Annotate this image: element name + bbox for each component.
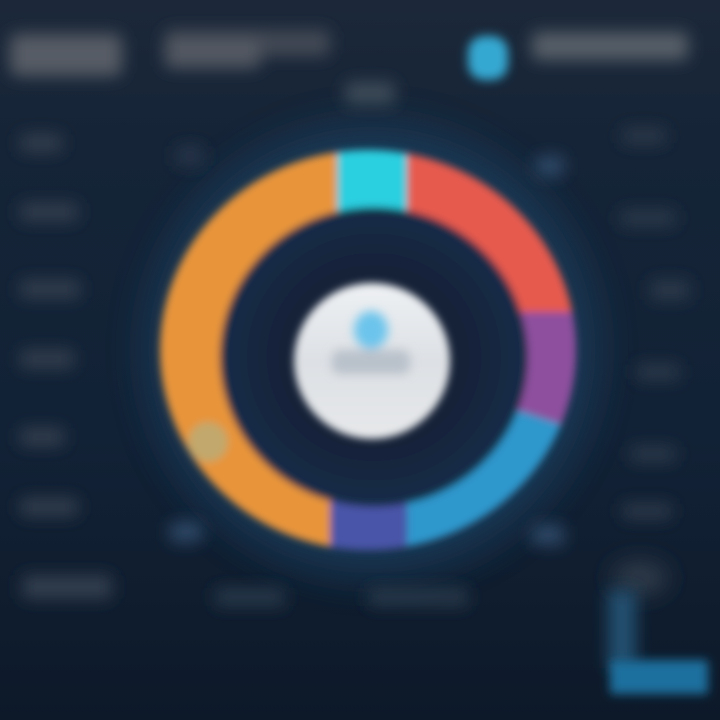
segment: cyan bbox=[330, 144, 414, 218]
panel: left labels bbox=[20, 134, 112, 599]
heading: center subtitle bbox=[165, 30, 330, 68]
segment: blue bbox=[401, 406, 565, 551]
segment: indigo bbox=[324, 496, 412, 555]
segment: tan highlight bbox=[188, 422, 228, 462]
panel: right labels bbox=[620, 128, 690, 519]
segment: red bbox=[398, 148, 578, 319]
horizontal bar bbox=[610, 660, 708, 694]
icon: center droplet bbox=[332, 311, 410, 374]
markers around ring bbox=[170, 146, 564, 545]
blob above bars bbox=[612, 562, 668, 594]
text block: top center label bbox=[345, 82, 395, 104]
donut chart bbox=[154, 144, 582, 555]
panel: bottom labels bbox=[215, 588, 468, 606]
chart glow backdrop bbox=[122, 100, 622, 600]
center disc bbox=[294, 283, 450, 439]
vertical bar bbox=[608, 590, 636, 668]
icon: cyan badge bbox=[468, 36, 508, 80]
segment: purple bbox=[512, 306, 582, 430]
panel: header bbox=[10, 30, 688, 104]
chart hole bbox=[220, 207, 528, 507]
heading: left title bbox=[10, 34, 122, 76]
heading: right title bbox=[532, 32, 688, 60]
bar chart: bottom right bbox=[608, 562, 708, 694]
segment: orange bbox=[154, 146, 345, 552]
